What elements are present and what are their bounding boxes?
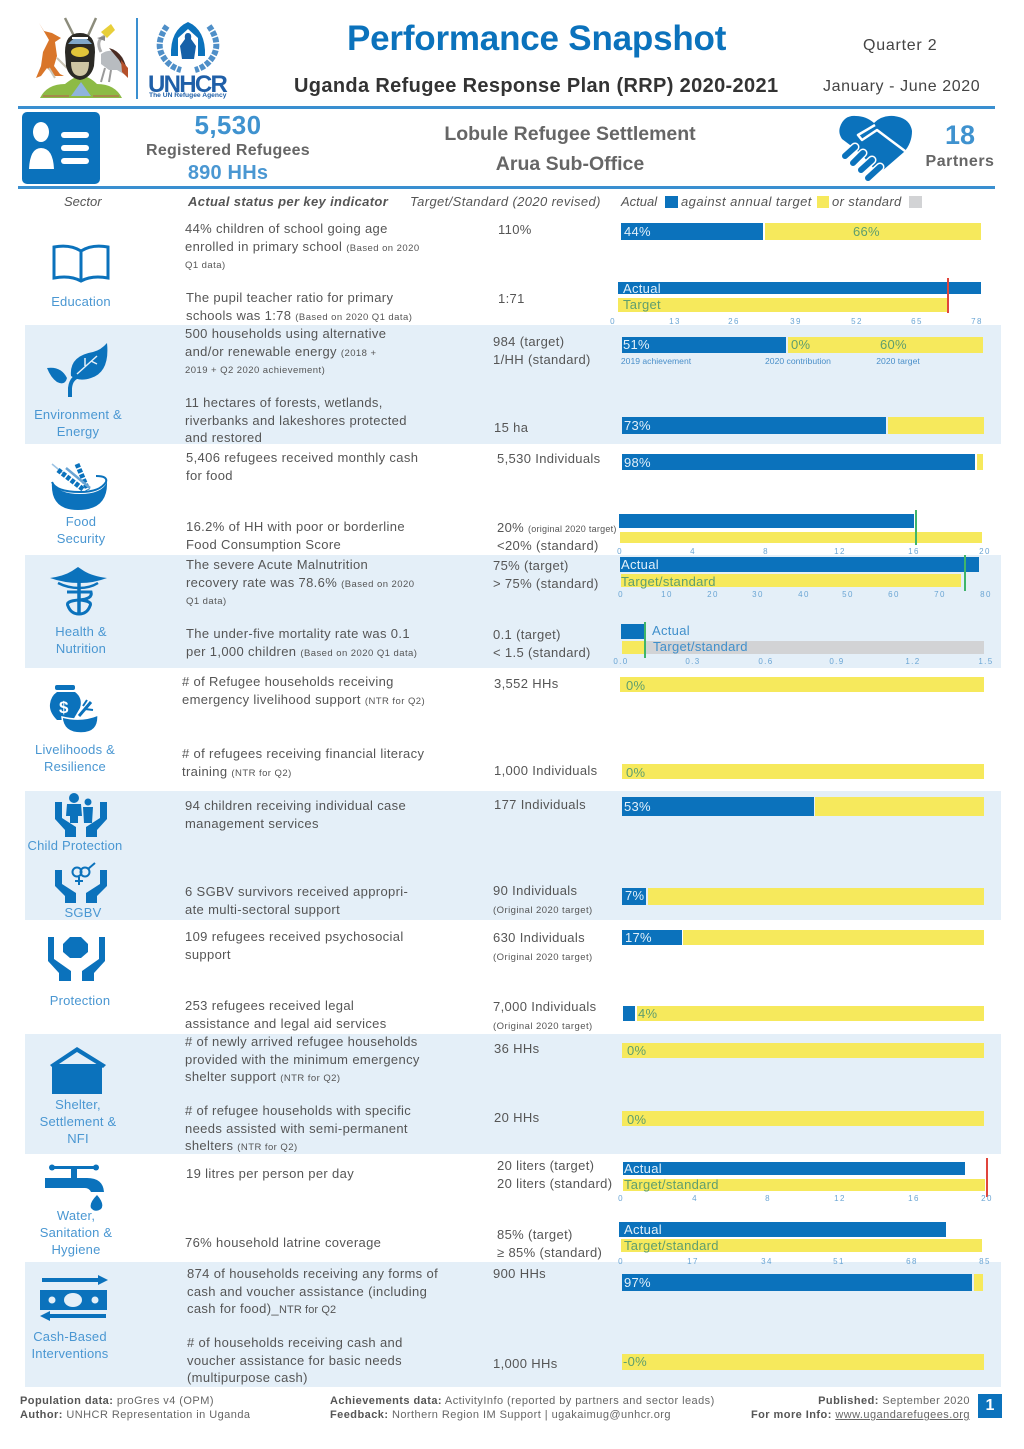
- label: [55, 624, 107, 656]
- chart: cash and voucher: [622, 1274, 983, 1291]
- indicator: basic needs: (multipurpose cash): [187, 1370, 308, 1385]
- indicator: case management: management services: [185, 816, 319, 830]
- target: food consumption: <20% (standard): [497, 538, 599, 552]
- chart: case management: [622, 797, 984, 816]
- indicator: pupil teacher: schools was 1:78 (Based on 2020 Q1 data): [186, 308, 412, 322]
- indicator: cash for food: [186, 449, 418, 484]
- label: Water,: [57, 1208, 95, 1223]
- indicator: financial literacy: # of refugees receiving financial literacy: [182, 746, 424, 761]
- chart: malnutrition recovery: 50: [842, 590, 854, 599]
- chart: latrine coverage: 85: [979, 1257, 991, 1266]
- target: mortality: [493, 626, 591, 661]
- chart: food consumption: 20: [979, 547, 991, 556]
- chart: pupil teacher ratio: 26: [728, 317, 740, 326]
- chart: under-five mortality: 1.2: [905, 657, 921, 666]
- indicator: malnutrition: [186, 556, 414, 608]
- chart: semi-permanent shelter: [622, 1111, 984, 1126]
- indicator: livelihood support: # of Refugee households receiving: [182, 674, 394, 689]
- label: Hygiene: [51, 1242, 101, 1257]
- icon: house: [50, 1047, 106, 1094]
- indicator: semi-permanent: shelters (NTR for Q2): [185, 1138, 298, 1153]
- label: Energy: [57, 424, 99, 439]
- chart: energy: 2020 contribution: [765, 356, 831, 366]
- indicator: food consumption: 16.2% of HH with poor or borderline: [186, 519, 405, 534]
- target: livelihood: 3,552 HHs: [494, 676, 559, 691]
- chart: basic needs cash: -0%: [623, 1354, 647, 1369]
- sector: cash: [31, 1275, 109, 1361]
- subtitle: Uganda Refugee Response Plan (RRP) 2020-2021: [294, 75, 778, 97]
- chart: food consumption: 0: [617, 547, 623, 556]
- label: Environment &: [34, 407, 122, 422]
- chart: water per person: 0: [618, 1194, 624, 1203]
- target: SGBV: [493, 882, 593, 917]
- chart: water per person: 12: [834, 1194, 846, 1203]
- chart: latrine coverage: [612, 1222, 997, 1266]
- target: energy: [493, 333, 591, 368]
- label: [35, 742, 115, 774]
- chart: pupil teacher ratio: 65: [911, 317, 923, 326]
- chart: livelihood support: 0%: [626, 678, 645, 693]
- chart: pupil teacher ratio: Actual: [623, 281, 661, 296]
- target: latrine: [497, 1226, 602, 1261]
- chart: pupil teacher ratio: 0: [610, 317, 616, 326]
- indicator: livelihood support: [182, 673, 425, 708]
- chart: latrine coverage: 34: [761, 1257, 773, 1266]
- panel: environment band: [25, 325, 1001, 444]
- indicator: SGBV survivors: 6 SGBV survivors received appropri-: [185, 884, 408, 899]
- indicator: basic needs: # of households receiving cash and: [187, 1335, 403, 1350]
- chart: under-five mortality: 0.0: [613, 657, 629, 666]
- period: January - June 2020: [823, 78, 980, 95]
- chart: enrolment: 66%: [853, 224, 880, 239]
- target: literacy: 1,000 Individuals: [494, 763, 598, 778]
- target: water: 20 liters (standard): [497, 1176, 612, 1190]
- icon: money bag and bowl: $: [59, 698, 69, 717]
- wordmark: UNHCR: [148, 71, 226, 98]
- icon: banknote with arrows: [40, 1275, 108, 1321]
- label: Registered Refugees: [146, 142, 310, 159]
- icon: handshake heart: [839, 116, 912, 181]
- footer: published and link: [751, 1394, 970, 1422]
- label: Security: [57, 531, 105, 546]
- chart: pupil teacher ratio: Target: [623, 297, 661, 312]
- chart: financial literacy: 0%: [626, 765, 645, 780]
- icon: refugee id card: [22, 112, 100, 184]
- chart: under-five mortality: 0.6: [758, 657, 774, 666]
- chart: food consumption: [612, 510, 992, 556]
- chart: energy: 2019 achievement: [621, 356, 691, 366]
- stat: partners: [926, 120, 994, 170]
- stat: registered refugees: [146, 110, 310, 184]
- footer: [18, 1394, 1003, 1422]
- chart: legal assistance: 4%: [638, 1006, 657, 1021]
- label: Shelter,: [55, 1097, 101, 1112]
- label: Health &: [55, 624, 107, 639]
- label: Resilience: [44, 759, 106, 774]
- chart: under-five mortality: 0.9: [829, 657, 845, 666]
- footer: population and author: Population data: proGres v4 (OPM): [20, 1395, 214, 1407]
- target: water: [497, 1157, 612, 1192]
- target: food consumption: 20% (original 2020 target): [497, 520, 617, 535]
- header: sector: Sector: [64, 194, 102, 209]
- label: Interventions: [31, 1346, 109, 1361]
- settlement name: Lobule Refugee Settlement: [444, 123, 696, 145]
- chart: under-five mortality: Target/standard: [653, 639, 748, 654]
- target: malnutrition: [493, 557, 599, 592]
- chart: water per person: 8: [765, 1194, 771, 1203]
- indicator: SGBV survivors: ate multi-sectoral support: [185, 902, 340, 916]
- footer: population and author: Author: UNHCR Representation in Uganda: [20, 1409, 250, 1421]
- indicator: livelihood support: emergency livelihood support (NTR for Q2): [182, 692, 425, 706]
- panel: cash band: [25, 1262, 1001, 1387]
- table header: [64, 194, 922, 209]
- chart: latrine coverage: Target/standard: [624, 1238, 719, 1253]
- indicator: cash and voucher: 874 of households receiving any forms of: [187, 1266, 438, 1281]
- indicator: cash and voucher: cash and voucher assistance (including: [187, 1284, 427, 1298]
- indicator: food consumption: Food Consumption Score: [186, 536, 341, 552]
- chart: forests: [622, 417, 984, 434]
- chart: forests: 73%: [624, 418, 651, 433]
- chart: financial literacy: [622, 764, 984, 779]
- chart: energy: [621, 337, 983, 367]
- value: 18: [945, 120, 975, 150]
- target: forests: 15 ha: [494, 420, 528, 435]
- target: basic needs: 1,000 HHs: [493, 1356, 558, 1371]
- indicator: case management: 94 children receiving individual case: [185, 798, 406, 813]
- footer: published and link: Published: September 2020: [818, 1395, 970, 1407]
- panel: child protection and SGBV band: [25, 791, 1001, 920]
- chart: water per person: [612, 1158, 997, 1204]
- settlement name: [444, 123, 696, 175]
- target: case management: 177 Individuals: [494, 797, 586, 812]
- label: SGBV: [65, 905, 101, 920]
- chart: water per person: 16: [908, 1194, 920, 1203]
- indicator: basic needs: voucher assistance for basic needs: [187, 1352, 402, 1368]
- target: enrolment: 110%: [498, 222, 532, 237]
- target: food consumption: [497, 519, 617, 554]
- chart: malnutrition recovery: 10: [661, 590, 673, 599]
- tagline: The UN Refugee Agency: [149, 92, 226, 99]
- chart: basic needs cash: [622, 1354, 984, 1370]
- target: malnutrition: > 75% (standard): [493, 576, 599, 590]
- indicator: semi-permanent: needs assisted with semi-permanent: [185, 1120, 408, 1136]
- chart: energy: 0%: [791, 337, 810, 352]
- icon: hands holding person: [48, 937, 105, 981]
- label: Cash-Based: [33, 1329, 107, 1344]
- indicator: cash for food: for food: [186, 468, 233, 482]
- icon: caduceus: [50, 567, 107, 616]
- target: energy: 1/HH (standard): [493, 352, 591, 366]
- indicator: pupil teacher: The pupil teacher ratio for primary: [186, 290, 393, 305]
- quarter: Quarter 2: [863, 37, 937, 54]
- chart: malnutrition recovery: [612, 555, 997, 601]
- sector: livelihoods: [35, 685, 115, 774]
- indicator: emergency shelter: [185, 1033, 420, 1086]
- target: emergency shelter: 36 HHs: [494, 1041, 539, 1056]
- label: Settlement &: [40, 1114, 116, 1129]
- indicator: financial literacy: training (NTR for Q2): [182, 764, 292, 778]
- chart: semi-permanent shelter: 0%: [627, 1112, 646, 1127]
- target: latrine: 85% (target): [497, 1227, 573, 1242]
- indicator: energy: 500 households using alternative: [185, 326, 386, 341]
- indicator: malnutrition: recovery rate was 78.6% (Based on 2020: [186, 574, 414, 590]
- chart: malnutrition recovery: 30: [752, 590, 764, 599]
- indicator: enrolment: 44% children of school going age: [185, 221, 388, 236]
- indicator: SGBV survivors: [185, 883, 408, 918]
- indicator: pupil teacher: [186, 289, 412, 324]
- chart: latrine coverage: 0: [618, 1257, 624, 1266]
- icon: money bag and bowl: [50, 685, 98, 732]
- footer: published and link: For more Info: www.ugandarefugees.org: [751, 1409, 970, 1421]
- chart: energy: 60%: [880, 337, 907, 352]
- icon: UNHCR hands and laurel: [156, 22, 220, 73]
- chart: malnutrition recovery: 70: [934, 590, 946, 599]
- target: legal: 7,000 Individuals: [493, 999, 597, 1014]
- indicator: semi-permanent: # of refugee households with specific: [185, 1103, 411, 1118]
- legend: against annual target: [681, 194, 812, 209]
- icon: book: [52, 244, 110, 283]
- label: Protection: [50, 993, 110, 1008]
- indicator: mortality: per 1,000 children (Based on 2020 Q1 data): [186, 644, 417, 658]
- chart: malnutrition recovery: 40: [798, 590, 810, 599]
- target: mortality: < 1.5 (standard): [493, 644, 591, 660]
- target: psychosocial: [493, 929, 593, 964]
- target values: [488, 215, 620, 1375]
- indicator: enrolment: [185, 220, 420, 272]
- chart: under-five mortality: Actual: [652, 623, 690, 638]
- chart: cash for food: [622, 454, 983, 470]
- chart: cash for food: 98%: [624, 455, 651, 470]
- indicator: latrine: 76% household latrine coverage: [185, 1235, 381, 1250]
- icon: water tap: [45, 1164, 104, 1211]
- label: NFI: [67, 1131, 89, 1146]
- chart: latrine coverage: Actual: [624, 1222, 662, 1237]
- chart: SGBV support: [622, 888, 984, 905]
- label: Child Protection: [28, 838, 122, 853]
- chart: under-five mortality: 0.3: [685, 657, 701, 666]
- indicator: cash for food: 5,406 refugees received monthly cash: [186, 450, 418, 465]
- indicator: emergency shelter: provided with the minimum emergency: [185, 1052, 420, 1066]
- chart: pupil teacher ratio: 13: [669, 317, 681, 326]
- indicator: cash and voucher: cash for food)_NTR for Q2: [187, 1301, 336, 1316]
- chart: cash and voucher: 97%: [624, 1275, 651, 1290]
- chart: psychosocial support: [622, 930, 984, 945]
- sector: education: [51, 244, 111, 309]
- chart: malnutrition recovery: 60: [888, 590, 900, 599]
- target: psychosocial: (Original 2020 target): [493, 952, 593, 962]
- label: Partners: [926, 153, 994, 170]
- label: [34, 407, 122, 439]
- chart: case management: 53%: [624, 799, 651, 814]
- target: mortality: 0.1 (target): [493, 627, 561, 642]
- chart: water per person: 20: [981, 1194, 993, 1203]
- indicator: legal: assistance and legal aid services: [185, 1016, 387, 1030]
- indicator: psychosocial: [185, 928, 404, 963]
- target: legal: [493, 998, 597, 1033]
- legend: Actual: [621, 194, 657, 209]
- indicator: mortality: [186, 625, 417, 660]
- title: Performance Snapshot: [347, 19, 726, 58]
- chart: food consumption: 16: [908, 547, 920, 556]
- indicator: malnutrition: Q1 data): [186, 596, 227, 607]
- indicator: case management: [185, 797, 406, 832]
- sector: WASH: [40, 1164, 112, 1257]
- indicator: legal: [185, 997, 387, 1032]
- settlement name: Arua Sub-Office: [496, 153, 644, 175]
- legend: [620, 194, 922, 209]
- target: water: 20 liters (target): [497, 1158, 594, 1173]
- indicator: semi-permanent: [185, 1102, 411, 1154]
- label: Nutrition: [56, 641, 106, 656]
- label: Livelihoods &: [35, 742, 115, 757]
- value: 5,530: [194, 110, 262, 140]
- indicator: psychosocial: 109 refugees received psychosocial: [185, 929, 404, 944]
- chart: under-five mortality: 1.5: [978, 657, 994, 666]
- sector: food security: [51, 463, 108, 546]
- chart: energy: 51%: [623, 337, 650, 352]
- chart: malnutrition recovery: 80: [980, 590, 992, 599]
- target: psychosocial: 630 Individuals: [493, 930, 585, 945]
- indicator: food consumption: [186, 518, 405, 553]
- chart: energy: 2020 target: [876, 356, 920, 366]
- target: semi-permanent: 20 HHs: [494, 1110, 539, 1125]
- indicator: enrolment: Q1 data): [185, 260, 226, 271]
- header: indicator: Actual status per key indicator: [188, 194, 388, 209]
- label: Sanitation &: [40, 1225, 112, 1240]
- footer: achievements and feedback: [330, 1394, 715, 1422]
- label: [57, 514, 106, 546]
- page number: 1: [986, 1397, 994, 1414]
- sector: SGBV: [55, 862, 107, 920]
- indicator texts: [182, 221, 438, 1385]
- indicator: financial literacy: [182, 745, 424, 780]
- target: pupil ratio: 1:71: [498, 291, 525, 306]
- indicator: energy: and/or renewable energy (2018 +: [185, 344, 376, 358]
- chart: water per person: 4: [692, 1194, 698, 1203]
- chart: pupil teacher ratio: [606, 278, 990, 326]
- label: Education: [51, 294, 111, 309]
- sector: environment: [34, 343, 122, 439]
- target: SGBV: (Original 2020 target): [493, 904, 593, 916]
- indicator: energy: [185, 325, 386, 378]
- chart: enrolment: [621, 223, 981, 240]
- chart: legal assistance: [623, 1006, 984, 1021]
- footer: achievements and feedback: Feedback: Northern Region IM Support | ugakaimug@unhcr.org: [330, 1409, 671, 1421]
- icon: Uganda coat of arms: [36, 18, 128, 98]
- sector: child protection: [28, 793, 122, 853]
- target: SGBV: 90 Individuals: [493, 883, 577, 898]
- icon: hands with children: [55, 793, 107, 837]
- panel: health band: [25, 555, 1001, 668]
- chart: food consumption: 12: [834, 547, 846, 556]
- chart: latrine coverage: 68: [906, 1257, 918, 1266]
- header: target: Target/Standard (2020 revised): [410, 194, 601, 209]
- indicator: forests: riverbanks and lakeshores protected: [185, 412, 407, 428]
- indicator: emergency shelter: shelter support (NTR for Q2): [185, 1069, 341, 1084]
- sector: shelter: [40, 1047, 116, 1146]
- sector: protection: [48, 937, 110, 1008]
- label: [31, 1329, 109, 1361]
- target: latrine: ≥ 85% (standard): [497, 1244, 602, 1260]
- target: legal: (Original 2020 target): [493, 1020, 593, 1032]
- label: [40, 1097, 116, 1146]
- divider line between logos: [136, 18, 138, 99]
- chart: water per person: Target/standard: [624, 1177, 719, 1192]
- chart: pupil teacher ratio: 39: [790, 317, 802, 326]
- label: [40, 1208, 112, 1257]
- footer: achievements and feedback: Achievements data: ActivityInfo (reported by partners and sector leads): [330, 1395, 715, 1407]
- chart: latrine coverage: 17: [687, 1257, 699, 1266]
- target: cash for food: 5,530 Individuals: [497, 451, 601, 466]
- logo: UNHCR: [148, 22, 228, 99]
- chart: malnutrition recovery: Target/standard: [621, 574, 716, 589]
- indicator: enrolment: enrolled in primary school (Based on 2020: [185, 238, 420, 254]
- indicator: psychosocial: support: [185, 946, 231, 962]
- indicator: energy: 2019 + Q2 2020 achievement): [185, 365, 325, 376]
- icon: bowl with grain: [51, 463, 108, 510]
- chart: emergency shelter: [622, 1043, 984, 1058]
- indicator: cash and voucher: [187, 1265, 438, 1318]
- households: 890 HHs: [188, 162, 268, 184]
- indicator: forests: [185, 394, 407, 446]
- chart: malnutrition recovery: Actual: [621, 557, 659, 572]
- indicator: legal: 253 refugees received legal: [185, 998, 354, 1013]
- chart: emergency shelter: 0%: [627, 1043, 646, 1058]
- chart: pupil teacher ratio: 52: [851, 317, 863, 326]
- indicator: mortality: The under-five mortality rate was 0.1: [186, 626, 410, 641]
- target: cash voucher: 900 HHs: [493, 1266, 546, 1281]
- label: Food: [66, 514, 96, 529]
- indicator: malnutrition: The severe Acute Malnutrition: [186, 557, 368, 572]
- icon: plant: [47, 343, 108, 397]
- panel: shelter band: [25, 1034, 1001, 1154]
- icon: hands with gender symbols: [55, 862, 107, 903]
- chart: malnutrition recovery: 20: [707, 590, 719, 599]
- indicator: basic needs: [187, 1334, 403, 1386]
- indicator: forests: 11 hectares of forests, wetlands,: [185, 395, 383, 410]
- indicator: emergency shelter: # of newly arrived refugee households: [185, 1034, 418, 1049]
- indicator: forests: and restored: [185, 430, 262, 445]
- chart: pupil teacher ratio: 78: [971, 317, 983, 326]
- chart: livelihood support: [620, 677, 984, 692]
- chart: food consumption: 4: [690, 547, 696, 556]
- chart: food consumption: 8: [763, 547, 769, 556]
- legend: or standard: [832, 194, 902, 209]
- chart: enrolment: 44%: [624, 224, 651, 239]
- chart: malnutrition recovery: 0: [618, 590, 624, 599]
- indicator: water: 19 litres per person per day: [186, 1166, 354, 1181]
- sector: health: [50, 567, 107, 656]
- target: energy: 984 (target): [493, 334, 564, 349]
- chart: psychosocial support: 17%: [625, 930, 652, 945]
- target: malnutrition: 75% (target): [493, 558, 569, 573]
- chart: under-five mortality: [610, 622, 998, 668]
- footer: population and author: [20, 1394, 250, 1422]
- chart: SGBV support: 7%: [625, 888, 644, 903]
- page number: [978, 1394, 1002, 1418]
- chart: latrine coverage: 51: [833, 1257, 845, 1266]
- chart: water per person: Actual: [624, 1161, 662, 1176]
